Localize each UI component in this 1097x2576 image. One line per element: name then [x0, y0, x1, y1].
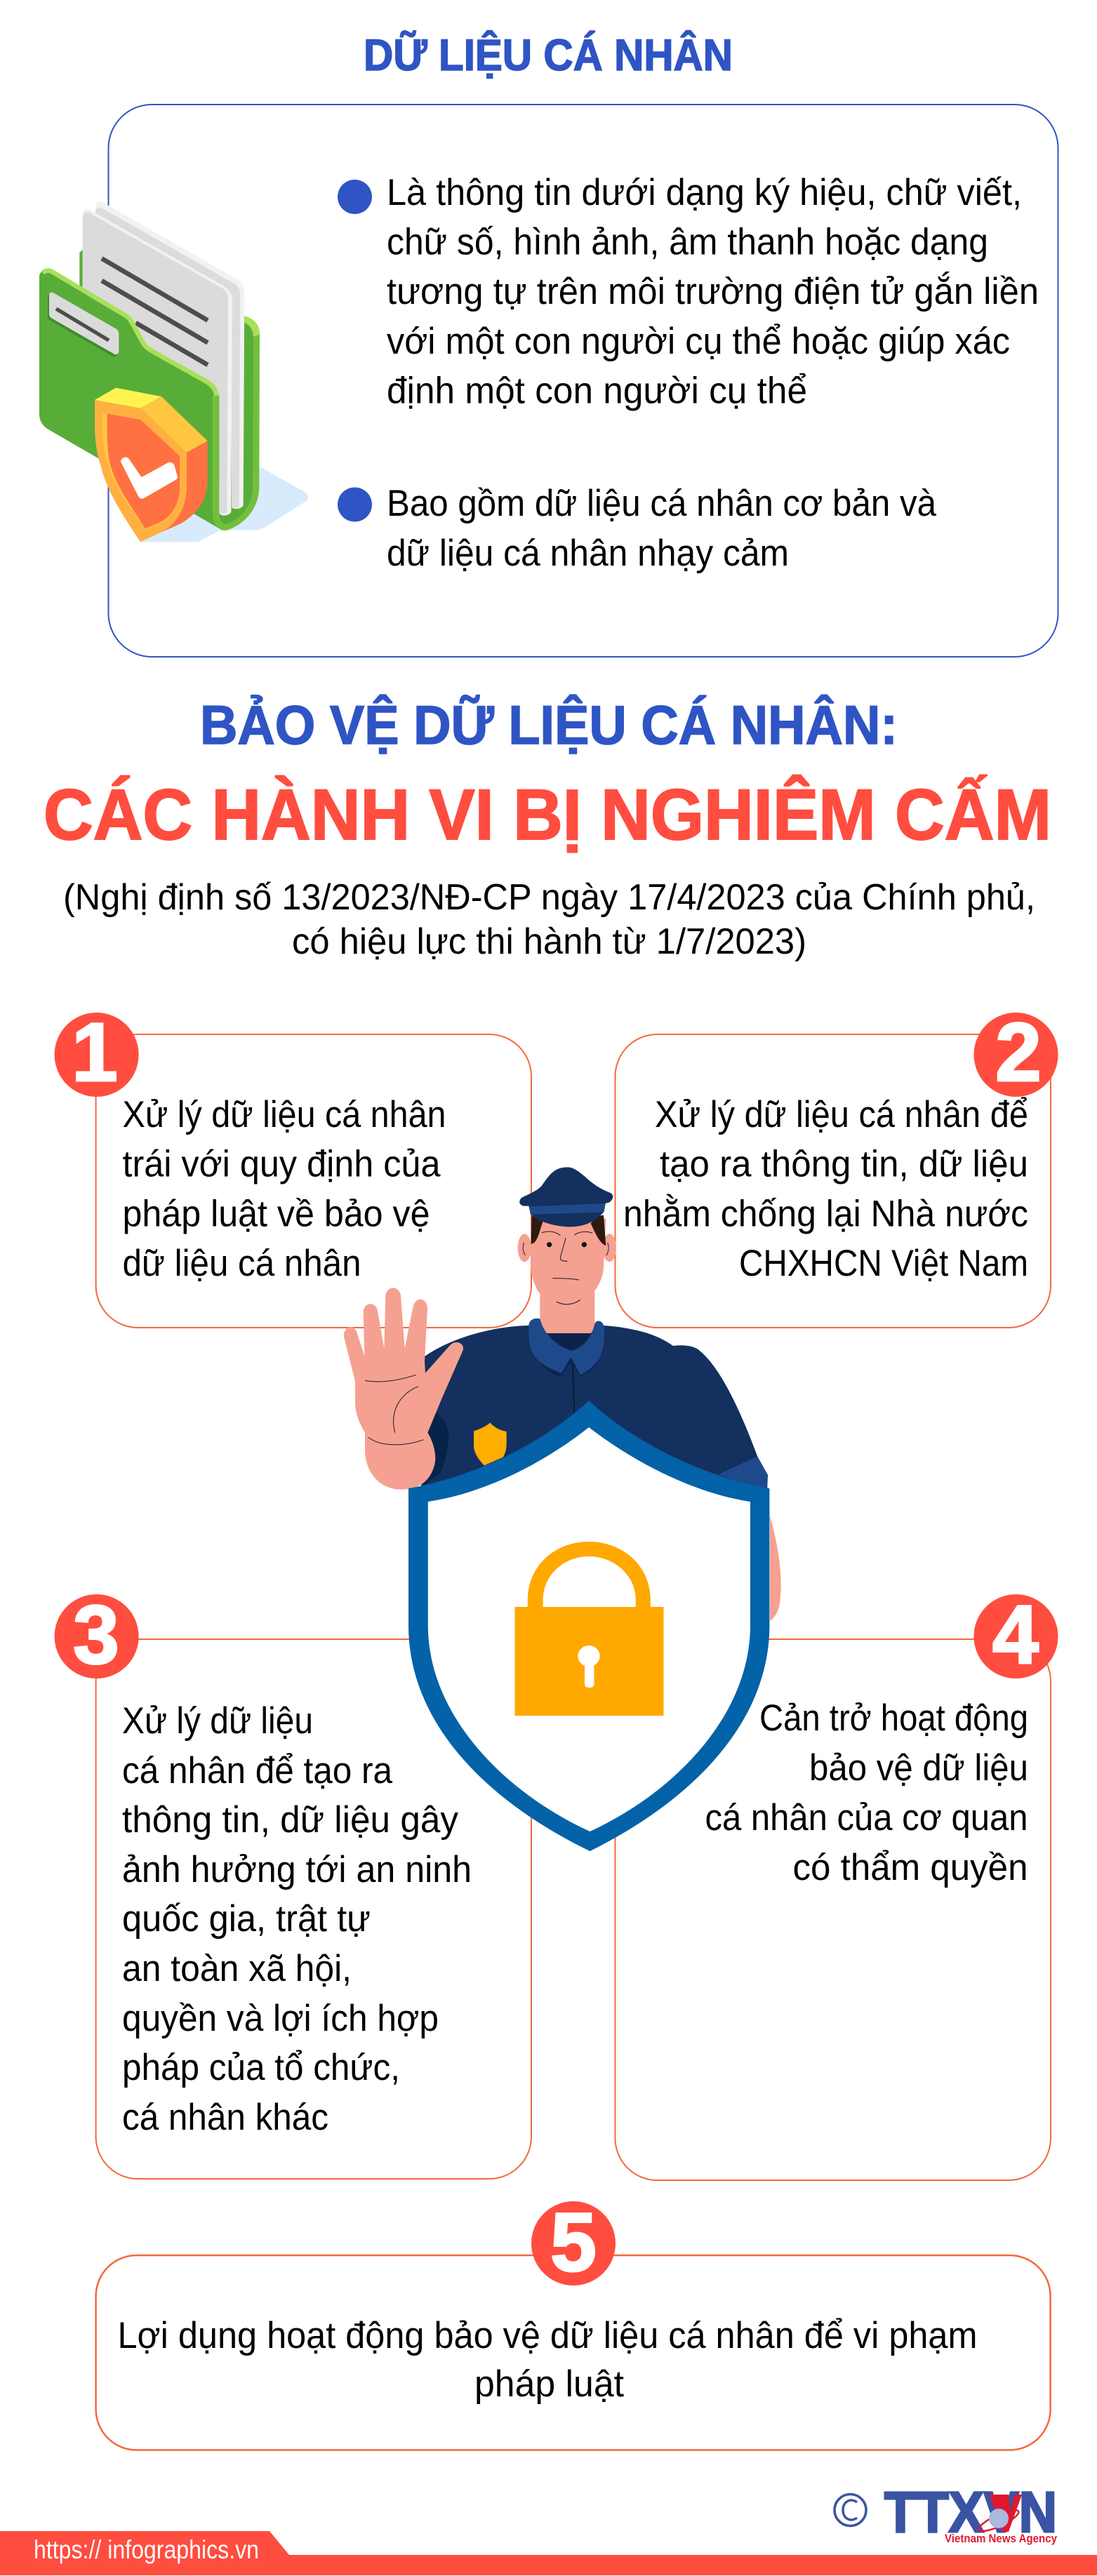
panel: prohibited act 1: trái với quy định của — [122, 1144, 441, 1184]
panel: prohibited act 3: thông tin, dữ liệu gây — [122, 1799, 458, 1841]
panel: prohibited act 1: pháp luật về bảo vệ — [122, 1193, 430, 1235]
panel: definition of personal data: Là thông tin dưới dạng ký hiệu, chữ viết, — [387, 172, 1022, 213]
panel: prohibited act 4: Cản trở hoạt động — [759, 1697, 1028, 1739]
panel: prohibited act 3: Xử lý dữ liệu — [122, 1700, 313, 1742]
panel: prohibited act 5: pháp luật — [474, 2363, 624, 2405]
subtitle: decree reference — [63, 877, 1035, 962]
subtitle: decree reference: có hiệu lực thi hành từ 1/7/2023) — [292, 921, 806, 962]
panel: prohibited act 2: tạo ra thông tin, dữ liệu — [660, 1144, 1028, 1184]
subtitle: decree reference: (Nghị định số 13/2023/NĐ-CP ngày 17/4/2023 của Chính phủ, — [63, 877, 1035, 918]
panel: prohibited act 1: dữ liệu cá nhân — [122, 1243, 361, 1284]
heading: prohibited acts: CÁC HÀNH VI BỊ NGHIÊM CẤM — [44, 775, 1051, 855]
panel: prohibited act 5: Lợi dụng hoạt động bảo vệ dữ liệu cá nhân để vi phạm — [118, 2315, 977, 2356]
panel: prohibited act 5: 5 — [550, 2196, 597, 2289]
panel: prohibited act 2: nhằm chống lại Nhà nước — [623, 1193, 1028, 1235]
panel: prohibited act 3: pháp của tổ chức, — [122, 2047, 400, 2088]
panel: definition of personal data: dữ liệu cá nhân nhạy cảm — [387, 533, 789, 574]
panel: prohibited act 1 — [55, 1006, 531, 1328]
title: personal data: DỮ LIỆU CÁ NHÂN — [364, 30, 733, 80]
panel: prohibited act 4: cá nhân của cơ quan — [705, 1797, 1028, 1838]
panel: definition of personal data: định một con người cụ thể — [387, 371, 807, 411]
panel: definition of personal data: với một con người cụ thể hoặc giúp xác — [387, 321, 1010, 362]
panel: prohibited act 1: Xử lý dữ liệu cá nhân — [122, 1094, 446, 1135]
panel: prohibited act 1: 1 — [72, 1006, 118, 1099]
panel: prohibited act 3: an toàn xã hội, — [122, 1948, 352, 1989]
panel: prohibited act 4: 4 — [992, 1589, 1039, 1681]
footer: website band — [0, 2531, 1097, 2575]
panel: definition of personal data: tương tự trên môi trường điện tử gắn liền — [387, 271, 1039, 312]
footer: website band: https:// infographics.vn — [34, 2535, 259, 2564]
panel: prohibited act 2: CHXHCN Việt Nam — [739, 1243, 1028, 1284]
panel: prohibited act 3: cá nhân khác — [122, 2097, 328, 2138]
icon: padlock — [515, 1542, 664, 1716]
panel: definition of personal data — [108, 105, 1058, 657]
panel: definition of personal data: chữ số, hình ảnh, âm thanh hoặc dạng — [387, 222, 988, 262]
panel: prohibited act 4: có thẩm quyền — [793, 1847, 1028, 1888]
panel: definition of personal data: Bao gồm dữ liệu cá nhân cơ bản và — [387, 483, 936, 524]
logo: TTXVN Vietnam News Agency: TTXVN — [884, 2481, 1057, 2544]
panel: prohibited act 5 — [96, 2196, 1051, 2450]
panel: prohibited act 3: ảnh hưởng tới an ninh — [122, 1849, 472, 1890]
panel: prohibited act 2: Xử lý dữ liệu cá nhân để — [655, 1094, 1028, 1135]
panel: prohibited act 3: quốc gia, trật tự — [122, 1898, 371, 1940]
panel: prohibited act 3 — [55, 1589, 531, 2179]
panel: prohibited act 2: 2 — [995, 1006, 1042, 1099]
panel: prohibited act 4: bảo vệ dữ liệu — [809, 1747, 1028, 1789]
illustration: police officer with raised hand — [344, 1167, 781, 1621]
icon: folder with documents and shield — [39, 201, 308, 542]
panel: prohibited act 3: cá nhân để tạo ra — [122, 1750, 392, 1791]
illustration: blue security shield — [408, 1401, 769, 1851]
logo: TTXVN Vietnam News Agency: Vietnam News Agency — [945, 2532, 1058, 2545]
panel: prohibited act 4 — [615, 1589, 1058, 2180]
panel: prohibited act 3: quyền và lợi ích hợp — [122, 1998, 439, 2039]
panel: prohibited act 2 — [615, 1006, 1058, 1328]
panel: prohibited act 3: 3 — [73, 1589, 119, 1681]
heading: protecting personal data: BẢO VỆ DỮ LIỆU CÁ NHÂN: — [200, 694, 898, 756]
